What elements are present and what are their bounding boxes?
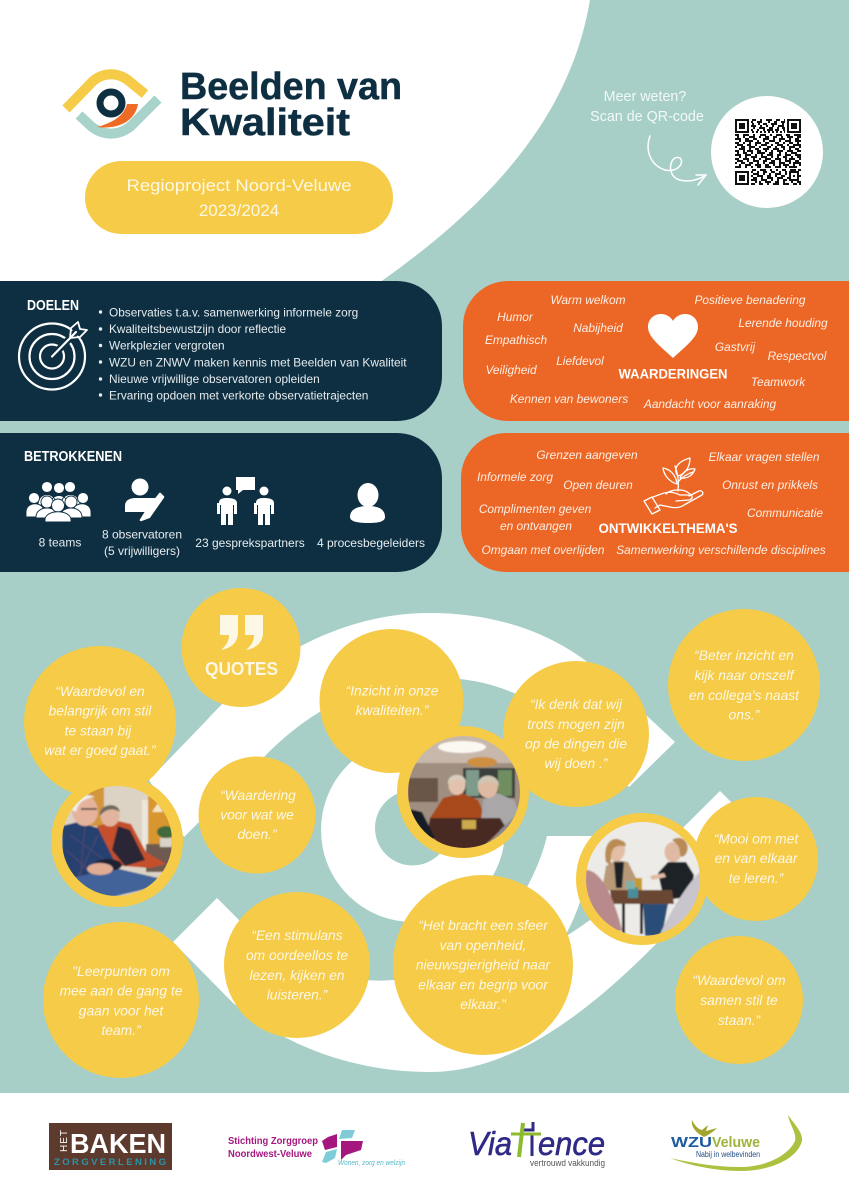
logo: Stichting Zorggroep Noordwest-Veluwe: Noordwest-Veluwe — [228, 1149, 312, 1160]
quote: het bracht: elkaar.” — [460, 997, 507, 1012]
quote: waardering: doen.” — [237, 827, 278, 842]
list: doelen: Werkplezier vergroten — [109, 338, 225, 352]
photo: couple on sofa — [60, 784, 175, 900]
word cloud: waarderingen — [485, 293, 828, 411]
logo: het Baken: HET — [59, 1129, 70, 1152]
word cloud: waarderingen: Nabijheid — [573, 321, 623, 335]
arrow: to QR code — [648, 136, 706, 185]
list: doelen — [99, 306, 407, 402]
photo: two women in conversation — [584, 820, 702, 940]
quote: leerpunten: mee aan de gang te — [60, 984, 183, 998]
icon: cross letters — [511, 1122, 541, 1157]
list: doelen: Ervaring opdoen met verkorte observatietrajecten — [109, 388, 368, 402]
quote: inzicht — [346, 684, 439, 718]
logo: Stichting Zorggroep Noordwest-Veluwe: Stichting Zorggroep — [228, 1136, 318, 1147]
labels: betrokkenen: 8 observatoren — [102, 528, 182, 542]
pill: project title: 2023/2024 — [199, 201, 279, 220]
word cloud: ontwikkelthema's: Communicatie — [747, 506, 823, 520]
quote: een stimulans: “Een stimulans — [251, 928, 343, 943]
logo: WZU Veluwe: Nabij in welbevinden — [696, 1150, 760, 1159]
panel: doelen — [0, 281, 442, 421]
logo: Stichting Zorggroep Noordwest-Veluwe — [228, 1130, 405, 1167]
quote: een stimulans: luisteren.” — [267, 988, 329, 1002]
QR call to action text: Scan de QR-code — [590, 109, 704, 125]
labels: betrokkenen: 8 teams — [39, 536, 81, 550]
word cloud: ontwikkelthema's: Omgaan met overlijden — [482, 543, 605, 557]
big white eye graphic — [149, 613, 765, 1072]
quote: mooi: en van elkaar — [715, 851, 799, 866]
word cloud: waarderingen: Kennen van bewoners — [510, 392, 628, 406]
word cloud: waarderingen: Gastvrij — [715, 340, 756, 354]
quote: beter inzicht: ons.” — [729, 708, 761, 722]
logo wordmark: Beelden van — [180, 66, 402, 108]
quote: ik denk: “Ik denk dat wij — [530, 697, 623, 712]
quote: beter inzicht: en collega's naast — [689, 688, 800, 703]
quote: waardevol om samen: “Waardevol om — [692, 973, 786, 988]
eye: lower band — [173, 791, 765, 1072]
panel: waarderingen — [463, 281, 849, 421]
icon: conversation partners — [217, 477, 274, 525]
quote: mooi: “Mooi om met — [714, 832, 799, 846]
QR call to action text: Meer weten? — [604, 89, 686, 105]
word cloud: ontwikkelthema's: Grenzen aangeven — [536, 448, 638, 462]
logo: WZU Veluwe: WZU — [671, 1135, 712, 1151]
quote: mooi: te leren.” — [729, 871, 785, 886]
heading: quotes: QUOTES — [205, 658, 278, 679]
logo: Viattence — [468, 1122, 605, 1168]
word cloud: ontwikkelthema's: Elkaar vragen stellen — [708, 450, 820, 464]
QR call to action text — [590, 89, 704, 125]
logo: Beelden van Kwaliteit — [66, 66, 402, 144]
quote: waardevol en belangrijk: “Waardevol en — [55, 684, 145, 699]
quote: ik denk — [525, 697, 627, 771]
labels: betrokkenen: 4 procesbegeleiders — [317, 536, 425, 550]
quote: waardering: “Waardering — [220, 788, 296, 803]
logo: WZU Veluwe — [670, 1115, 802, 1171]
quote: een stimulans: lezen, kijken en — [249, 968, 345, 983]
list: doelen: Nieuwe vrijwillige observatoren opleiden — [109, 372, 320, 386]
quote: ik denk: op de dingen die — [525, 736, 627, 752]
white footer band — [0, 1093, 849, 1200]
icon: logo eye — [66, 74, 158, 134]
quote: ik denk: wij doen .” — [545, 756, 609, 771]
quote: het bracht: “Het bracht een sfeer — [418, 918, 549, 933]
quote: inzicht: kwaliteiten.” — [356, 703, 430, 718]
word cloud: ontwikkelthema's: Onrust en prikkels — [722, 478, 818, 492]
quote: het bracht — [416, 918, 552, 1012]
quote: leerpunten: "Leerpunten om — [72, 964, 170, 979]
word cloud: waarderingen: Veiligheid — [485, 363, 537, 377]
quote: leerpunten — [60, 964, 183, 1038]
labels: betrokkenen: (5 vrijwilligers) — [104, 544, 180, 558]
logo wordmark: Kwaliteit — [180, 102, 350, 144]
quote: een stimulans — [246, 928, 348, 1002]
quote: mooi — [714, 832, 799, 886]
quote: waardevol om samen — [692, 973, 786, 1028]
quote: waardevol en belangrijk: wat er goed gaat.” — [44, 743, 157, 758]
icon: hands — [322, 1130, 363, 1163]
icon: teams — [26, 482, 91, 522]
quote: waardevol en belangrijk: belangrijk om stil — [49, 704, 152, 718]
list: doelen: Observaties t.a.v. samenwerking informele zorg — [109, 306, 358, 320]
icon: plant on hand — [644, 458, 703, 514]
quote: waardering — [220, 788, 296, 842]
eye: iris ring — [321, 738, 505, 922]
word cloud: waarderingen: Teamwork — [751, 375, 806, 389]
logo: Stichting Zorggroep Noordwest-Veluwe: Wonen, zorg en welzijn — [338, 1160, 405, 1167]
icon: quotation marks — [220, 615, 263, 650]
icon: heart — [648, 314, 698, 358]
quote: leerpunten: team.” — [101, 1023, 142, 1038]
panel: ontwikkelthema's — [461, 433, 849, 572]
icon: swoosh — [670, 1115, 802, 1171]
word cloud: waarderingen: Lerende houding — [738, 316, 828, 330]
quotes badge — [205, 615, 278, 679]
panel: betrokkenen — [0, 433, 442, 572]
word cloud: ontwikkelthema's: en ontvangen — [500, 519, 572, 533]
logo: Viattence: Via — [468, 1125, 512, 1162]
list: doelen: WZU en ZNWV maken kennis met Beelden van Kwaliteit — [109, 356, 407, 370]
quote: beter inzicht: kijk naar onszelf — [695, 668, 796, 683]
quote: het bracht: nieuwsgierigheid naar — [416, 958, 552, 972]
pill: project title: Regioproject Noord-Veluwe — [126, 176, 352, 195]
logo: WZU Veluwe: Veluwe — [712, 1135, 760, 1151]
icon: bird — [692, 1120, 717, 1137]
quote: waardering: voor wat we — [220, 808, 294, 822]
word cloud: waarderingen: Respectvol — [768, 349, 827, 363]
quote: waardevol en belangrijk: te staan bij — [65, 724, 132, 738]
pill: project title — [85, 161, 393, 234]
quote: een stimulans: om oordeellos te — [246, 948, 348, 963]
logo: het Baken — [49, 1123, 172, 1170]
icon: process supervisor — [350, 483, 385, 523]
quote: ik denk: trots mogen zijn — [527, 717, 625, 732]
word cloud: waarderingen: Humor — [497, 310, 534, 324]
white header area — [0, 0, 590, 285]
quote: leerpunten: gaan voor het — [79, 1004, 164, 1018]
word cloud: ontwikkelthema's: Open deuren — [563, 478, 633, 492]
quote: het bracht: elkaar en begrip voor — [418, 978, 549, 992]
list: doelen: Kwaliteitsbewustzijn door reflectie — [109, 322, 286, 336]
labels: betrokkenen — [39, 528, 425, 558]
eye: upper band — [149, 613, 675, 837]
logo: het Baken: BAKEN — [70, 1128, 166, 1159]
quote: waardevol en belangrijk — [44, 684, 157, 758]
heading: doelen: DOELEN — [27, 298, 79, 314]
word cloud: waarderingen: Liefdevol — [556, 354, 604, 368]
icon: target with arrow — [19, 321, 87, 390]
QR code — [711, 96, 823, 208]
quote: het bracht: van openheid, — [440, 938, 526, 953]
logo wordmark — [180, 66, 402, 144]
heading: betrokkenen: BETROKKENEN — [24, 449, 122, 465]
word cloud: waarderingen: Aandacht voor aanraking — [643, 397, 776, 411]
quote: waardevol om samen: samen stil te — [700, 993, 778, 1008]
logo: het Baken: ZORGVERLENING — [54, 1157, 166, 1168]
quote: beter inzicht — [689, 648, 800, 722]
heading: waarderingen: WAARDERINGEN — [618, 366, 728, 382]
word cloud: ontwikkelthema's — [477, 448, 826, 557]
bubble shapes — [24, 588, 820, 1078]
eye: crescent — [470, 836, 592, 985]
logo: Viattence: vertrouwd vakkundig — [530, 1158, 605, 1168]
quote: beter inzicht: “Beter inzicht en — [694, 648, 794, 663]
quote: waardevol om samen: staan.” — [718, 1013, 761, 1028]
word cloud: waarderingen: Warm welkom — [550, 293, 626, 307]
word cloud: ontwikkelthema's: Samenwerking verschillende disciplines — [616, 543, 826, 557]
heading: ontwikkelthema's: ONTWIKKELTHEMA'S — [598, 520, 738, 536]
photo: two women at table — [405, 735, 525, 850]
word cloud: ontwikkelthema's: Informele zorg — [477, 470, 553, 484]
word cloud: waarderingen: Positieve benadering — [694, 293, 806, 307]
quote bubbles — [24, 588, 820, 1078]
word cloud: waarderingen: Empathisch — [485, 333, 547, 347]
word cloud: ontwikkelthema's: Complimenten geven — [479, 502, 592, 516]
icon: observer with pencil — [125, 478, 163, 520]
logo: Viattence: ence — [538, 1125, 605, 1162]
quote: inzicht: “Inzicht in onze — [346, 684, 439, 698]
labels: betrokkenen: 23 gesprekspartners — [195, 536, 305, 550]
